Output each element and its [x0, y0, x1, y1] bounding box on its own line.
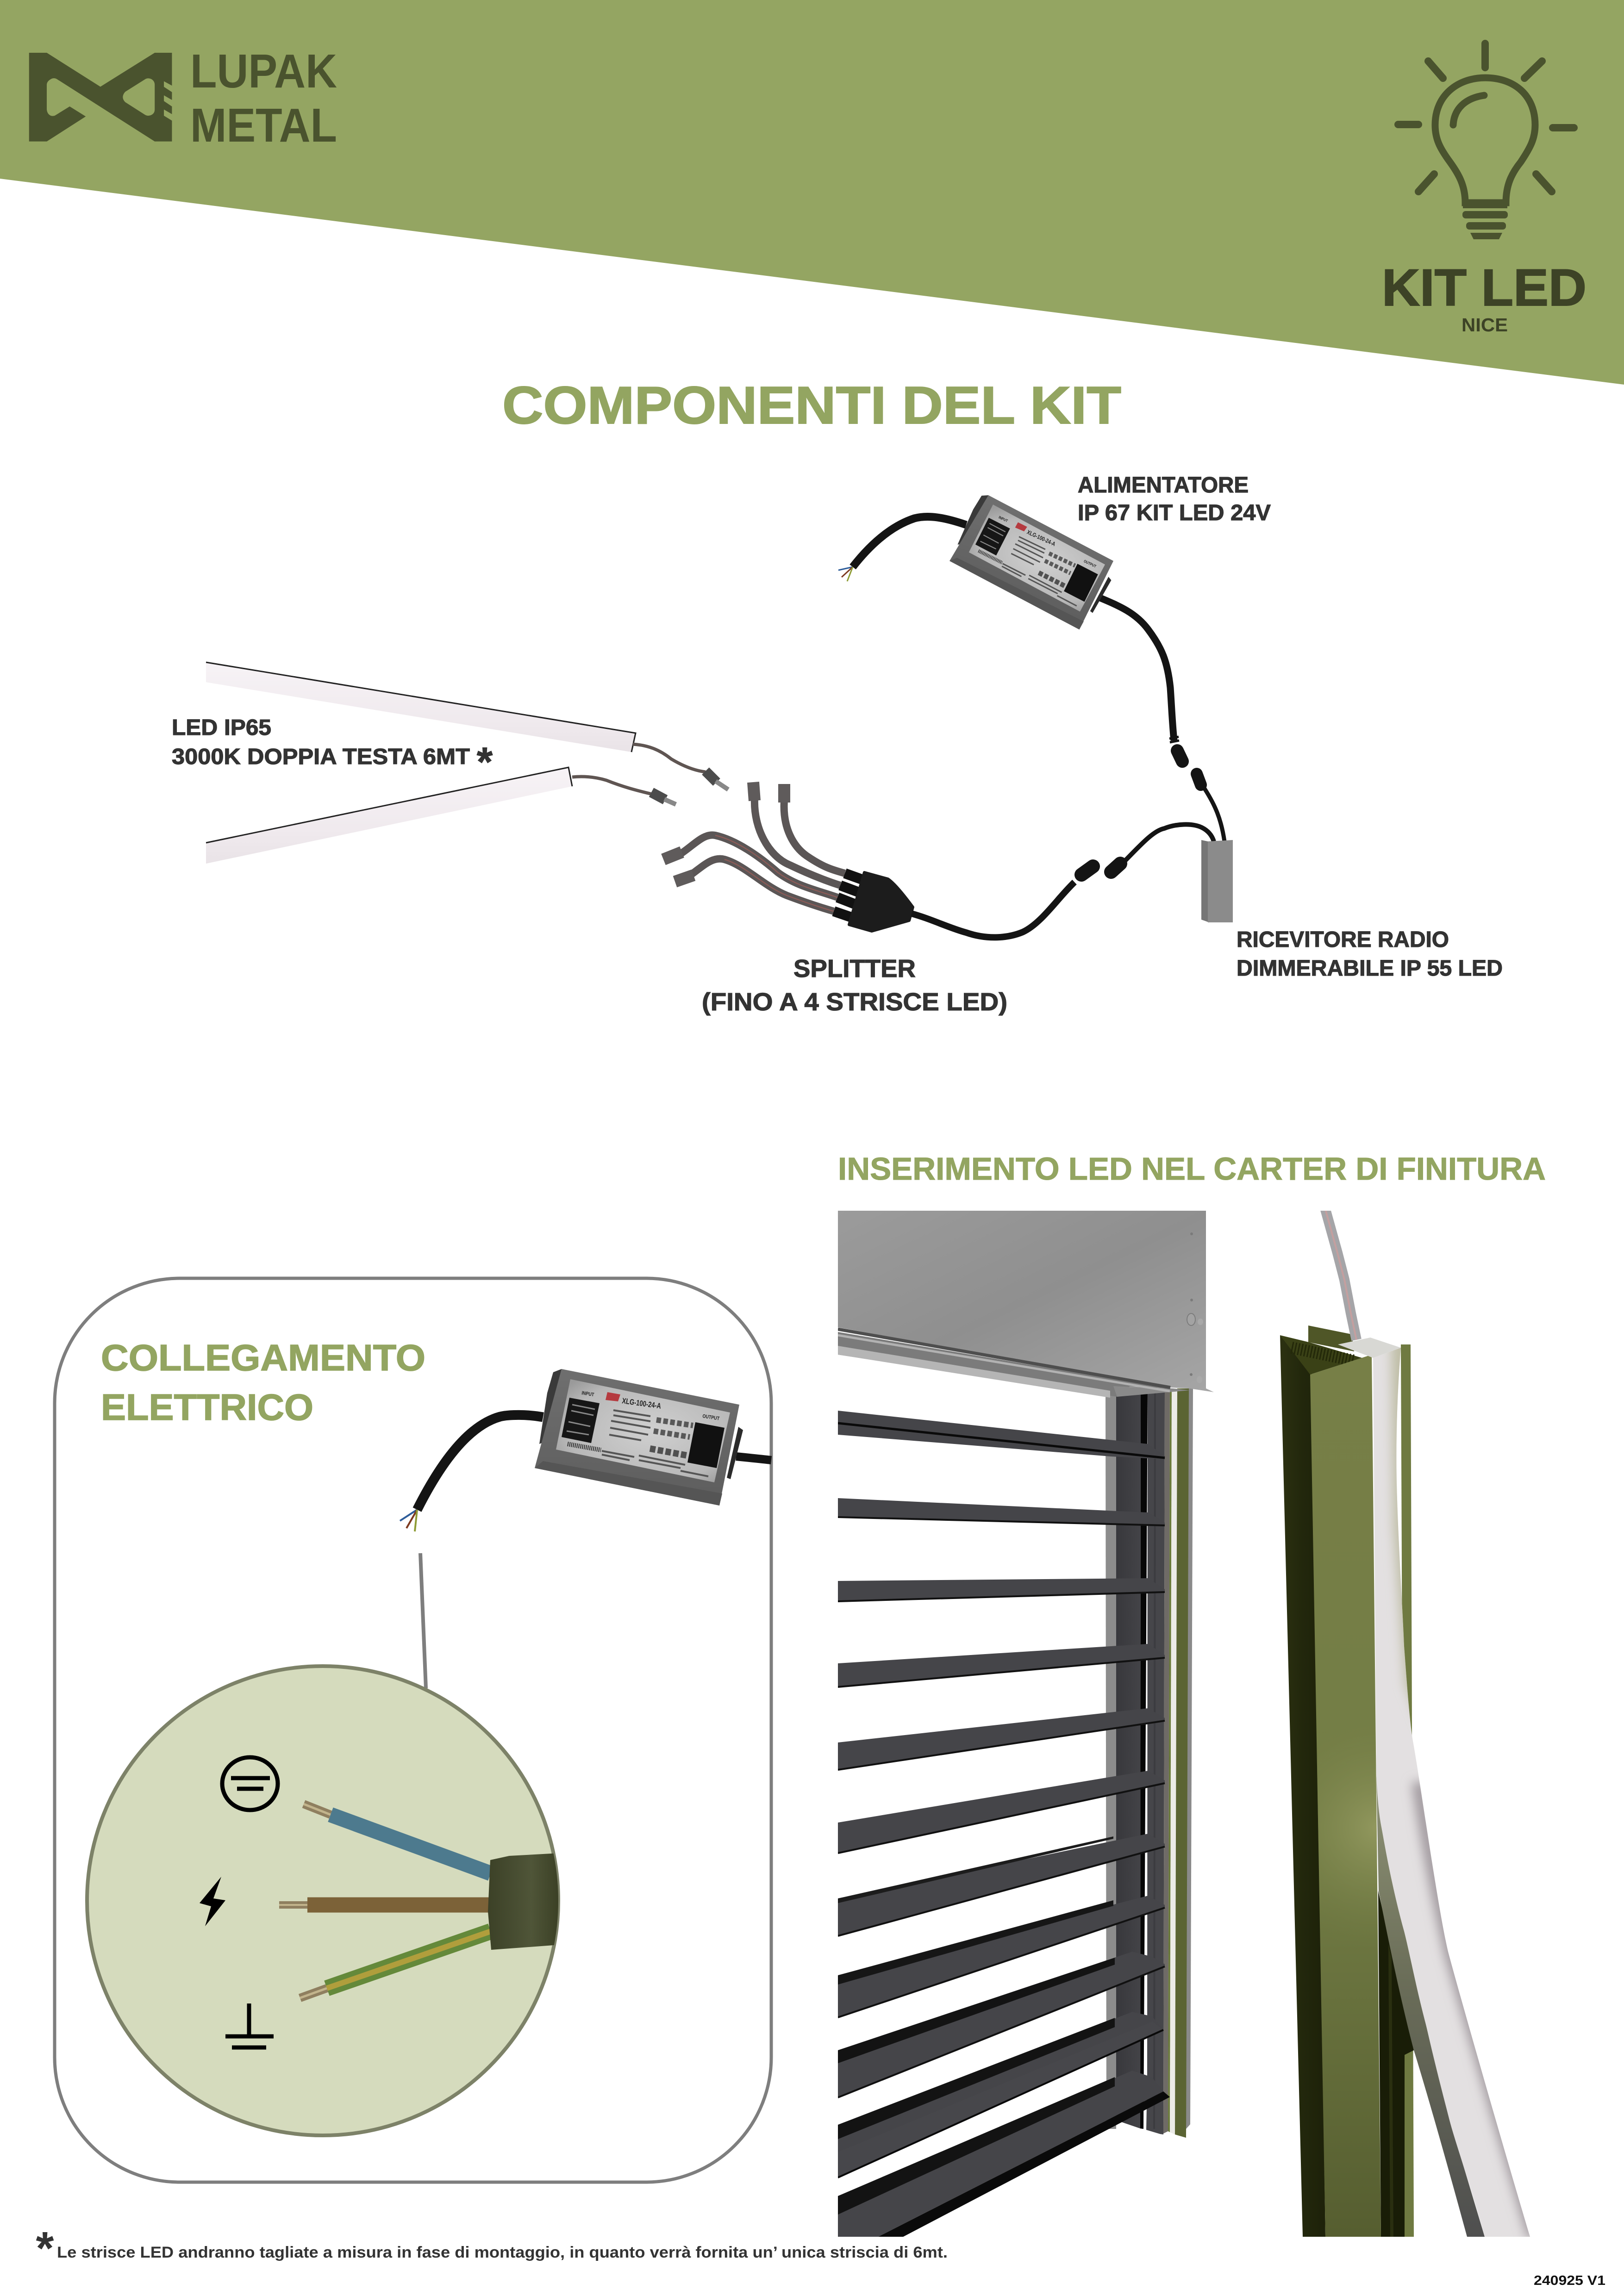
power supply detail	[400, 1369, 771, 1531]
power supply body and label: XLG-100-24-A	[1026, 529, 1056, 548]
power supply body and label: OUTPUT	[1083, 559, 1097, 569]
panel frame	[55, 1278, 771, 2182]
icon: light bulb	[1398, 44, 1574, 239]
icon: live bolt	[200, 1877, 225, 1926]
footnote: *	[36, 2222, 54, 2274]
receiver box	[1201, 840, 1233, 922]
logo: Lupak Metal	[29, 44, 337, 152]
power supply body and label: INPUT	[998, 515, 1009, 523]
bulb highlight	[1453, 95, 1484, 125]
label: ricevitore radio: DIMMERABILE IP 55 LED	[1237, 956, 1503, 981]
panel heading	[101, 1337, 425, 1428]
bulb rays	[1398, 44, 1574, 192]
power supply	[838, 489, 1182, 761]
wire: live brown	[279, 1901, 492, 1909]
dark gap	[1378, 1891, 1414, 2237]
logo wordmark: LUPAK	[190, 44, 337, 98]
footnote	[36, 2222, 948, 2274]
back fin	[1308, 1325, 1354, 1351]
label: LED IP65: LED IP65	[172, 716, 271, 740]
heading: KIT LED: KIT LED	[1382, 259, 1587, 317]
label: alimentatore: IP 67 KIT LED 24V	[1078, 501, 1271, 525]
logo mark	[29, 53, 172, 142]
panel: electrical connection	[55, 1278, 771, 2182]
splitter wire connectors	[663, 782, 784, 882]
bulb glass	[1435, 78, 1535, 203]
icon: neutral symbol	[222, 1757, 278, 1810]
strip underside	[1376, 1775, 1485, 2237]
label: splitter: SPLITTER	[793, 955, 916, 983]
wire: earth green yellow	[300, 1931, 491, 1998]
label: splitter: (FINO A 4 STRISCE LED)	[702, 988, 1007, 1016]
splitter plugs	[834, 873, 863, 917]
label: alimentatore	[1078, 473, 1271, 525]
bulb screw base	[1462, 201, 1508, 239]
label: splitter	[702, 955, 1007, 1016]
green carter profile	[1280, 1208, 1537, 2240]
logo wordmark	[190, 44, 337, 152]
splitter wires	[681, 799, 845, 911]
top panel	[838, 1211, 1214, 1398]
LED strip top	[1338, 1338, 1401, 1358]
title: Componenti del kit: COMPONENTI DEL KIT	[502, 376, 1121, 435]
splitter output cable	[912, 774, 1224, 937]
detail circle	[87, 1666, 560, 2135]
cable jacket	[488, 1853, 560, 1950]
splitter body	[849, 872, 913, 931]
panel heading: ELETTRICO	[101, 1387, 313, 1428]
label: LED IP65	[172, 716, 493, 784]
LED strip lower	[206, 767, 676, 864]
front face	[1310, 1355, 1381, 2237]
label: ricevitore radio	[1237, 927, 1503, 981]
footnote: Le strisce LED andranno tagliate a misura in fase di montaggio, in quanto verrà fornita un’ unica striscia di 6mt.	[57, 2244, 948, 2261]
label: LED IP65: *	[477, 739, 493, 784]
panel fasteners	[1187, 1232, 1203, 1383]
logo wordmark: METAL	[190, 99, 337, 152]
panel heading: COLLEGAMENTO	[101, 1337, 425, 1378]
louvre column	[1106, 1388, 1193, 2138]
louvre slats	[838, 1411, 1170, 2237]
header band	[0, 0, 1624, 385]
version code: 240925 V1	[1534, 2273, 1605, 2288]
power supply detail: INPUT	[581, 1390, 594, 1398]
ribbed top	[1280, 1335, 1362, 1375]
dark left face	[1280, 1335, 1325, 2237]
heading: inserimento LED: INSERIMENTO LED NEL CARTER DI FINITURA	[838, 1151, 1546, 1187]
diagram: kit components	[206, 489, 1233, 937]
LED strip	[1366, 1333, 1537, 2240]
power supply detail: OUTPUT	[702, 1413, 720, 1422]
wire: neutral blue	[304, 1804, 491, 1873]
icon: earth symbol	[225, 2004, 274, 2047]
label: alimentatore: ALIMENTATORE	[1078, 473, 1249, 498]
subheading: NICE: NICE	[1462, 314, 1508, 336]
power supply detail: XLG-100-24-A	[621, 1396, 662, 1411]
LED strip upper	[206, 662, 728, 790]
callout line	[420, 1553, 426, 1688]
louvre illustration	[838, 1211, 1214, 2237]
cable	[1325, 1208, 1356, 1340]
power cables	[853, 516, 1182, 761]
strip shading	[1391, 1333, 1535, 2237]
label: LED IP65: 3000K DOPPIA TESTA 6MT	[172, 745, 470, 769]
power supply body and label	[943, 489, 1123, 635]
splitter	[663, 782, 913, 931]
right flange	[1401, 1344, 1414, 2237]
label: ricevitore radio: RICEVITORE RADIO	[1237, 927, 1449, 952]
